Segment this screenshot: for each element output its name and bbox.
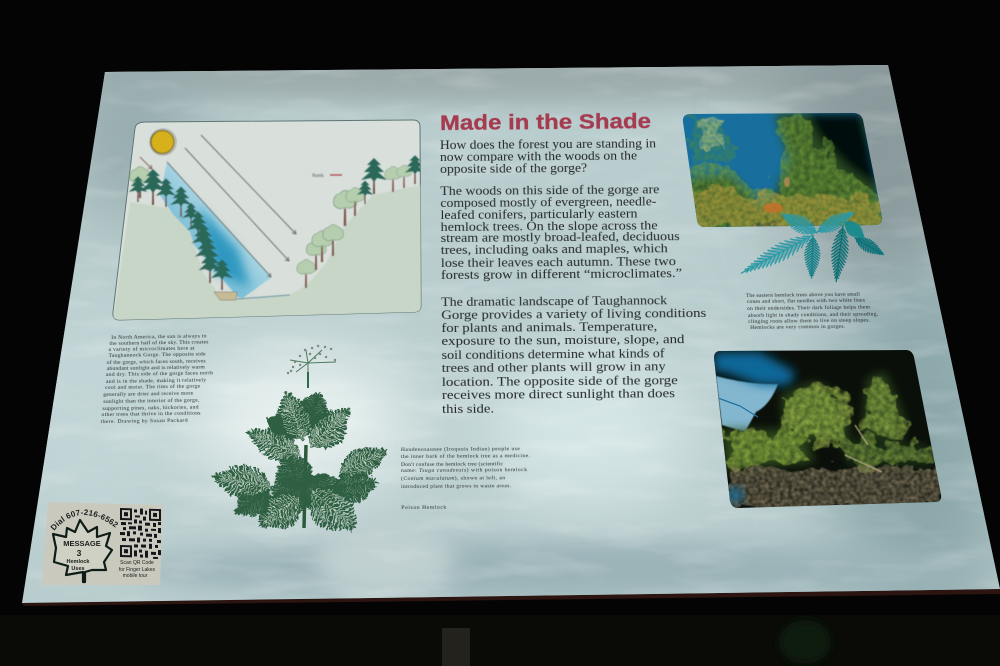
conifers on north-facing rim [129,167,192,217]
photo: deciduous canopy [680,110,885,230]
intro question [440,136,657,176]
caption: microclimate drawing: and dry. This side of the gorge faces north [106,369,213,378]
caption: microclimate drawing: abundant sunlight and is relatively warm [107,364,206,372]
main text [440,136,707,416]
intro question: opposite side of the gorge? [440,161,588,176]
paragraph: two forests: trees, including oaks and maples, which [441,241,669,257]
caption: eastern hemlock: The eastern hemlock trees above you have small [746,292,860,299]
QR instruction: mobile tour [123,573,148,579]
paragraph: landscape: The dramatic landscape of Taughannock [441,293,668,309]
dark leaf fronds [210,386,393,545]
badge: audio tour and QR code [42,502,163,585]
caption: eastern hemlock: clinging roots allow them to live on steep slopes. [748,317,871,325]
QR instruction [119,560,156,579]
stone wall and stream [214,292,290,300]
paragraph: landscape: receives more direct sunlight than does [442,386,675,402]
caption: Haudenosaunee and poison hemlock: the inner bark of the hemlock tree as a medicine. [401,452,531,460]
caption: Haudenosaunee and poison hemlock [401,445,531,511]
caption: Haudenosaunee and poison hemlock: introduced plant that grows in waste areas. [401,483,512,490]
paragraph: two forests: composed mostly of evergreen, needle- [440,194,656,210]
caption: microclimate drawing [99,333,214,425]
caption: eastern hemlock [746,291,879,331]
paragraph: landscape: this side. [442,402,494,416]
caption: microclimate drawing: the southern half of the sky. This creates [109,338,208,347]
message text [63,539,101,572]
conifers on sunny rim [357,155,425,204]
paragraph: landscape [441,293,707,416]
icon: maple leaf [53,520,112,582]
north label and arrow: North [312,174,324,179]
sun [150,129,176,155]
caption: microclimate drawing: a variety of microclimates here at [108,345,195,353]
message text: Uses [71,566,85,572]
caption: microclimate drawing: of the gorge, which faces south, receives [107,357,206,366]
paragraph: landscape: Gorge provides a variety of living conditions [441,306,706,322]
caption: eastern hemlock: Hemlocks are very common in gorges. [750,324,846,331]
caption: eastern hemlock: cones and short, flat needles with two white lines [747,297,865,305]
caption: microclimate drawing: In North America, the sun is always in [111,333,207,341]
QR instruction: for Finger Lakes [119,567,156,573]
paragraph: landscape: for plants and animals. Temperature, [441,319,657,335]
flower umbel [288,346,336,388]
paragraph: two forests: lose their leaves each autumn. These two [441,254,676,270]
caption: microclimate drawing: cool and moist. The rims of the gorge [105,382,201,391]
caption: eastern hemlock: on their undersides. Their dark foliage helps them [747,303,871,312]
caption: microclimate drawing: and is in the shade, making it relatively [106,377,206,385]
north label and arrow [312,174,342,179]
caption: microclimate drawing: generally are drier and receive more [103,391,194,398]
paragraph: landscape: soil conditions determine what kinds of [442,346,666,362]
caption: microclimate drawing: other trees that thrive in the conditions [102,411,201,418]
blue light on shaded slope [160,162,272,300]
paragraph: two forests: The woods on this side of the gorge are [440,182,660,198]
QR code [120,508,161,559]
paragraph: landscape: exposure to the sun, moisture, slope, and [441,332,685,348]
QR instruction: Scan QR Code [120,560,154,566]
icon: hemlock sprig [737,206,887,283]
message text: MESSAGE [63,539,101,548]
ground [113,185,421,320]
caption: Haudenosaunee and poison hemlock: (Conium maculatum), shown at left, an [401,474,505,482]
icon: poison hemlock plant [210,346,393,545]
label: poison hemlock: Poison Hemlock [401,505,446,511]
pale leaf flecks [216,392,388,537]
paragraph: landscape: location. The opposite side of the gorge [442,373,678,389]
message text: Hemlock [67,559,90,565]
caption: eastern hemlock: absorb light in shady conditions, and their spreading, [748,311,879,319]
caption: microclimate drawing: sunlight than the interior of the gorge, [103,397,200,405]
paragraph: two forests [440,182,682,282]
intro question: now compare with the woods on the [440,148,638,164]
paragraph: landscape: trees and other plants will grow in any [442,359,667,375]
broad-leaved trees on sunny slope [297,165,412,288]
paragraph: two forests: leafed conifers, particularly eastern [440,206,638,222]
hemlocks on shaded slope [182,203,233,290]
caption: Haudenosaunee and poison hemlock: Haudenosaunee (Iroquois Indian) people use [401,445,520,453]
paragraph: two forests: hemlock trees. On the slope across the [441,218,658,234]
title: Made in the Shade [440,110,651,135]
panel: sign board [22,65,1000,606]
caption: Haudenosaunee and poison hemlock: name: Tsuga canadensis) with poison hemlock [401,466,527,474]
intro question: How does the forest you are standing in [440,136,657,152]
stem [304,445,306,528]
caption: microclimate drawing: Taughannock Gorge. The opposite side [109,351,206,359]
caption: Haudenosaunee and poison hemlock: Don't confuse the hemlock tree (scientific [401,460,503,468]
dial number: Dial 607-216-6562 [50,509,118,530]
caption: microclimate drawing: supporting pines, oaks, hickories, and [102,405,199,412]
paragraph: two forests: forests grow in different “microclimates.” [441,266,682,282]
photo: hemlock foliage [710,348,945,510]
paragraph: two forests: stream are mostly broad-leafed, deciduous [441,229,680,245]
caption: microclimate drawing: there. Drawing by Susan Packard [101,418,188,425]
message text: 3 [77,548,82,558]
diagram: gorge cross-section [113,120,425,320]
sun ray arrows [140,135,296,277]
